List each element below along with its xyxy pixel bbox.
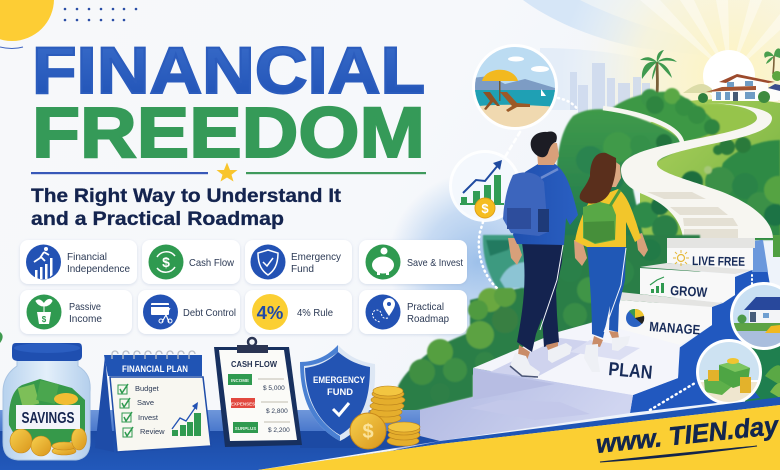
dotted route (479, 98, 752, 410)
card: debt control (138, 290, 240, 334)
subtitle: The Right Way to Understand It (31, 185, 342, 207)
face (610, 160, 621, 187)
emergency fund shield: EMERGENCY (313, 375, 365, 385)
floor (380, 368, 633, 449)
card: financial independence: Financial (67, 251, 107, 263)
lid (12, 343, 82, 361)
surplus row: SURPLUS (235, 426, 256, 431)
card: debt control: Debt Control (183, 307, 236, 319)
income row (228, 374, 285, 392)
coins (10, 428, 86, 456)
card: emergency fund: Emergency (291, 251, 342, 263)
card: 4 percent rule (245, 290, 352, 334)
lower right foliage (745, 235, 780, 405)
yellow banner (258, 397, 780, 470)
trousers (517, 243, 563, 352)
surplus row: $ 2,200 (268, 427, 290, 434)
income row: INCOME (231, 378, 249, 383)
step: manage (594, 292, 723, 345)
cash flow clipboard (214, 338, 302, 447)
small palm (764, 48, 780, 81)
back hill trees (612, 88, 757, 142)
card: practical roadmap: Roadmap (407, 313, 449, 325)
income row: $ 5,000 (263, 385, 285, 392)
money (9, 379, 85, 447)
title divider (31, 162, 426, 182)
cash flow clipboard: CASH FLOW (231, 359, 278, 369)
step: grow: GROW (670, 283, 708, 300)
backpack (503, 169, 558, 236)
title (32, 33, 425, 173)
forest (398, 235, 700, 414)
sky scene (523, 0, 780, 190)
card: practical roadmap (359, 290, 467, 334)
dot pattern (64, 8, 137, 21)
step: grow (640, 263, 753, 303)
circle: growth chart: $ (481, 201, 489, 216)
circle: beach (470, 44, 560, 135)
jeans (587, 246, 626, 338)
card: financial independence: Independence (67, 263, 130, 275)
financial plan calendar: Invest (138, 413, 159, 422)
villa (698, 74, 780, 103)
card: passive income: $ (42, 315, 47, 324)
financial plan calendar: Review (140, 427, 165, 436)
left hill (556, 109, 684, 245)
label (16, 405, 80, 429)
palm view inside dotted arc (483, 235, 530, 288)
blue stair side (630, 240, 770, 413)
expenses row: EXPENSES (231, 402, 255, 406)
winding road (603, 103, 773, 238)
hand (508, 238, 522, 265)
surplus row (233, 421, 290, 434)
card: practical roadmap: Practical (407, 301, 444, 313)
title: FREEDOM (32, 94, 425, 173)
financial plan calendar (95, 351, 211, 452)
city skyline (570, 63, 650, 113)
card: cash flow: Cash Flow (189, 257, 234, 269)
binding rings (112, 351, 195, 359)
savings jar (3, 343, 90, 460)
step: live free (667, 238, 755, 270)
card: financial independence (20, 240, 137, 284)
light hills (640, 84, 780, 240)
card: passive income (20, 290, 132, 334)
jacket (575, 189, 641, 247)
step: plan: PLAN (608, 359, 653, 384)
card: passive income: Income (69, 313, 102, 325)
card: emergency fund: Fund (291, 263, 314, 275)
hair (580, 153, 616, 204)
card: emergency fund (245, 240, 352, 284)
expenses row: $ 2,800 (266, 408, 288, 415)
card: 4 percent rule: 4% (257, 302, 283, 323)
ankles (592, 331, 619, 347)
expenses row (231, 398, 288, 415)
card: cash flow (142, 240, 240, 284)
financial plan calendar: Budget (135, 384, 160, 393)
shirt (513, 164, 578, 245)
subtitle: and a Practical Roadmap (31, 208, 284, 230)
financial plan calendar: FINANCIAL PLAN (122, 364, 188, 374)
savings jar: SAVINGS (22, 410, 74, 427)
card: cash flow: $ (162, 254, 170, 270)
circle: house (730, 282, 780, 353)
step: live free: LIVE FREE (692, 254, 745, 269)
card: passive income: Passive (69, 301, 101, 313)
website url: www. TIEN.day (594, 410, 780, 459)
card: 4 percent rule: 4% Rule (297, 307, 333, 319)
emergency fund shield (300, 345, 375, 441)
right bushes (681, 137, 780, 240)
backpack (583, 190, 620, 244)
shoes (584, 336, 630, 372)
step: manage: MANAGE (649, 319, 701, 338)
checklist (118, 384, 133, 437)
man walking (503, 131, 578, 377)
staircase (380, 238, 755, 449)
subtitle (31, 185, 342, 230)
ankles (518, 342, 558, 360)
background tint (380, 170, 570, 350)
head (537, 142, 559, 165)
leaf (0, 332, 3, 343)
coin stacks (350, 386, 420, 449)
hands (574, 233, 648, 266)
title: FINANCIAL (32, 33, 425, 107)
financial plan calendar: Save (137, 398, 154, 407)
shoes (510, 343, 572, 377)
coin stacks: $ (362, 421, 374, 443)
palm tree (640, 50, 677, 94)
card: save and invest (359, 240, 467, 284)
emergency fund shield: FUND (327, 387, 354, 397)
top left decoration (0, 0, 54, 48)
step: plan (473, 322, 680, 395)
card: save and invest: Save & Invest (407, 257, 463, 269)
calendar chart (172, 402, 201, 436)
table band (0, 410, 440, 470)
circle: cash (695, 339, 765, 407)
woman walking (574, 153, 648, 372)
circle: growth chart (449, 150, 521, 222)
